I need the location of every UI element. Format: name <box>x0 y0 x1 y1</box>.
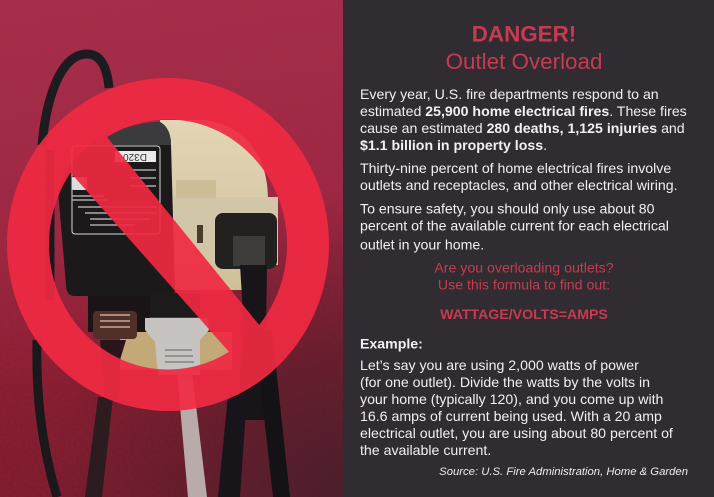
icon: black cords right <box>218 368 290 497</box>
text block: example explanation: (for one outlet). Divide the watts by the volts in <box>360 374 650 390</box>
text block: fire statistics: estimated 25,900 home electrical fires. These fires <box>360 103 687 119</box>
heading: danger: DANGER! <box>472 22 576 47</box>
text block: example explanation: Let’s say you are using 2,000 watts of power <box>360 357 639 373</box>
callout: formula: WATTAGE/VOLTS=AMPS <box>440 306 608 322</box>
text block: thirty-nine percent <box>360 160 678 193</box>
adapter label <box>72 146 160 234</box>
text block: fire statistics: Every year, U.S. fire departments respond to an <box>360 86 659 102</box>
text block: example explanation: your home (typically 120), and you come up with <box>360 391 663 407</box>
source note: Source: U.S. Fire Administration, Home & Garden <box>439 466 688 478</box>
callout: overloading question: Use this formula to find out: <box>438 276 610 292</box>
callout: overloading question: Are you overloading outlets? <box>434 259 614 275</box>
icon: power cord arching over the adapter <box>42 54 109 145</box>
text block: example explanation: 16.6 amps of current being used. With a 20 amp <box>360 408 662 424</box>
icon: prohibition sign <box>7 78 329 411</box>
panel: outlet photo <box>0 0 343 497</box>
text block: fire statistics: $1.1 billion in property loss. <box>360 137 547 153</box>
text block: safety advice <box>360 201 669 252</box>
icon: black plug in top socket <box>215 213 277 420</box>
text block: fire statistics <box>360 86 687 153</box>
text block: fire statistics: cause an estimated 280 deaths, 1,125 injuries and <box>360 120 685 136</box>
icon: black power adapter <box>58 122 175 332</box>
callout: overloading question <box>434 259 614 292</box>
adapter label: D320 <box>123 151 147 162</box>
icon: grey plug and white cord <box>145 293 209 497</box>
text block: example explanation: electrical outlet, you are using about 80 percent of <box>360 425 673 441</box>
icon: brown plug <box>85 311 137 497</box>
icon: black cord left <box>37 150 57 497</box>
heading: example: Example: <box>360 336 423 352</box>
text block: safety advice: percent of the available current for each electrical <box>360 218 669 234</box>
panel: dark text background <box>343 0 714 497</box>
text block: example explanation: the available current. <box>360 442 491 458</box>
heading: outlet overload: Outlet Overload <box>446 49 602 74</box>
text block: safety advice: To ensure safety, you should only use about 80 <box>360 201 655 217</box>
text block: safety advice: outlet in your home. <box>360 236 484 252</box>
text block: thirty-nine percent: Thirty-nine percent of home electrical fires involve <box>360 160 671 176</box>
text block: thirty-nine percent: outlets and receptacles, and other electrical wiring. <box>360 177 678 193</box>
icon: cream outlet plate <box>120 120 278 370</box>
text block: example explanation <box>360 357 673 458</box>
